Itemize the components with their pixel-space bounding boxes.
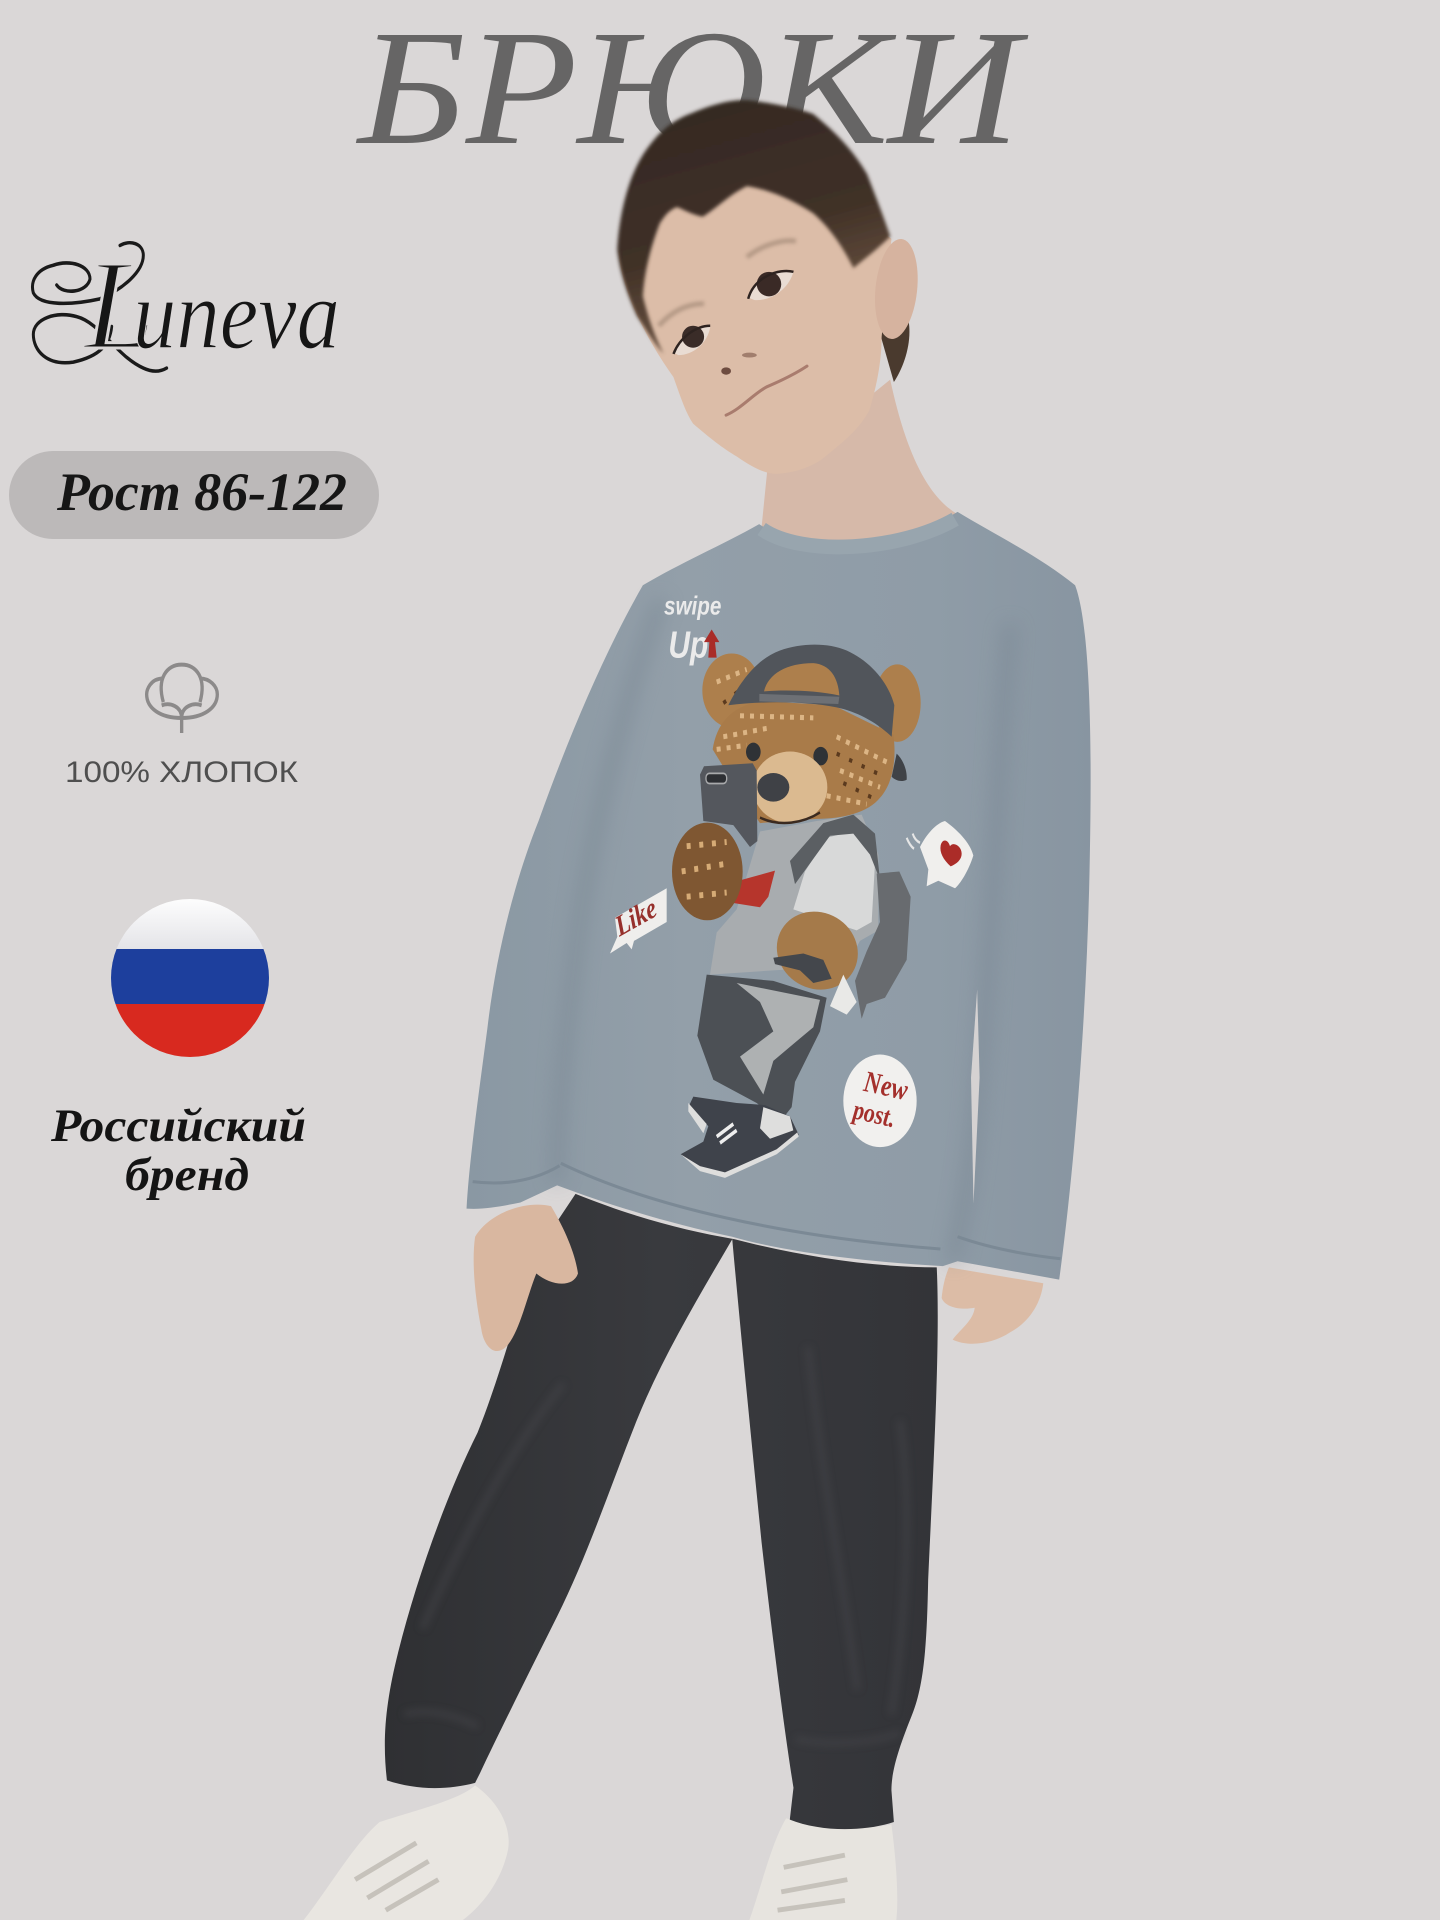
trousers bbox=[385, 1194, 938, 1829]
red arrow bbox=[704, 629, 719, 658]
camera bbox=[706, 773, 727, 783]
brand logo: Luneva bbox=[32, 234, 340, 376]
bubble: heart bbox=[907, 821, 973, 888]
badge: new post: New bbox=[861, 1064, 910, 1107]
left eye bbox=[673, 326, 710, 355]
fist flecks bbox=[682, 842, 730, 897]
muzzle bbox=[753, 752, 827, 823]
right eye bbox=[748, 271, 793, 300]
long sleeve shirt bbox=[467, 512, 1091, 1280]
hair back bbox=[879, 321, 909, 382]
sneaker laces bbox=[717, 1124, 737, 1143]
sneaker bbox=[681, 1097, 799, 1177]
phone bbox=[700, 763, 757, 847]
height pill bbox=[9, 451, 379, 539]
neck bbox=[762, 380, 958, 542]
brand logo: Luneva: uneva bbox=[133, 259, 340, 370]
print text: swipe up bbox=[664, 591, 721, 667]
badge: new post bbox=[843, 1055, 917, 1147]
ear bbox=[870, 237, 922, 341]
fur flecks bbox=[717, 669, 887, 804]
left shoe bbox=[304, 1785, 509, 1920]
collar bbox=[762, 519, 955, 547]
trouser highlight bbox=[737, 983, 820, 1095]
brand logo: Luneva: L bbox=[82, 234, 155, 376]
brand origin label bbox=[50, 1100, 306, 1201]
mouth bbox=[726, 366, 807, 415]
bear ears bbox=[702, 653, 921, 742]
white glove hem bbox=[830, 975, 857, 1015]
bear head bbox=[713, 701, 895, 823]
print text: swipe up: Up bbox=[668, 624, 708, 667]
nose bbox=[721, 353, 757, 375]
eyebrows bbox=[659, 241, 796, 326]
backpack strap bbox=[790, 815, 880, 884]
gap between sleeve and body bbox=[971, 989, 980, 1204]
title: БРЮКИ bbox=[356, 0, 1029, 179]
cap bbox=[728, 645, 894, 737]
cotton label: 100% ХЛОПОК bbox=[65, 756, 299, 789]
hair bbox=[617, 100, 890, 354]
backpack bbox=[855, 871, 911, 1019]
shirt shading bbox=[557, 600, 1010, 1261]
shoe laces bbox=[355, 1843, 847, 1910]
cap strap bbox=[759, 694, 839, 704]
left hand bbox=[474, 1205, 578, 1351]
shirt hem and cuffs bbox=[473, 1163, 1060, 1259]
cap opening bbox=[764, 663, 839, 696]
nose bbox=[757, 773, 789, 802]
eyes bbox=[746, 743, 828, 765]
right shoe bbox=[749, 1818, 897, 1920]
icon: russian flag bbox=[111, 899, 269, 1057]
brand origin label: бренд bbox=[125, 1149, 249, 1201]
red graphic bbox=[733, 871, 775, 907]
height pill: Рост 86-122 bbox=[56, 462, 347, 522]
badge: new post: post. bbox=[850, 1095, 897, 1134]
face bbox=[618, 135, 891, 474]
sneaker toe cap and sole bbox=[681, 1103, 799, 1178]
fist bbox=[672, 823, 743, 920]
icon: cotton bbox=[147, 665, 217, 733]
brand origin label: Российский bbox=[50, 1100, 306, 1152]
trouser folds bbox=[404, 1347, 907, 1743]
child model bbox=[304, 100, 1091, 1920]
mouth bbox=[760, 813, 820, 823]
right hand bbox=[942, 1267, 1043, 1344]
sleeve highlight bbox=[793, 829, 875, 930]
shirt print: teddy bear bbox=[610, 591, 973, 1178]
t-shirt bbox=[710, 815, 878, 975]
watch bbox=[773, 954, 832, 983]
trousers bbox=[697, 975, 827, 1122]
cap brim behind bbox=[892, 754, 907, 781]
arm bbox=[773, 905, 862, 996]
print text: swipe up: swipe bbox=[664, 591, 721, 620]
bubble: like: Like bbox=[610, 890, 661, 943]
